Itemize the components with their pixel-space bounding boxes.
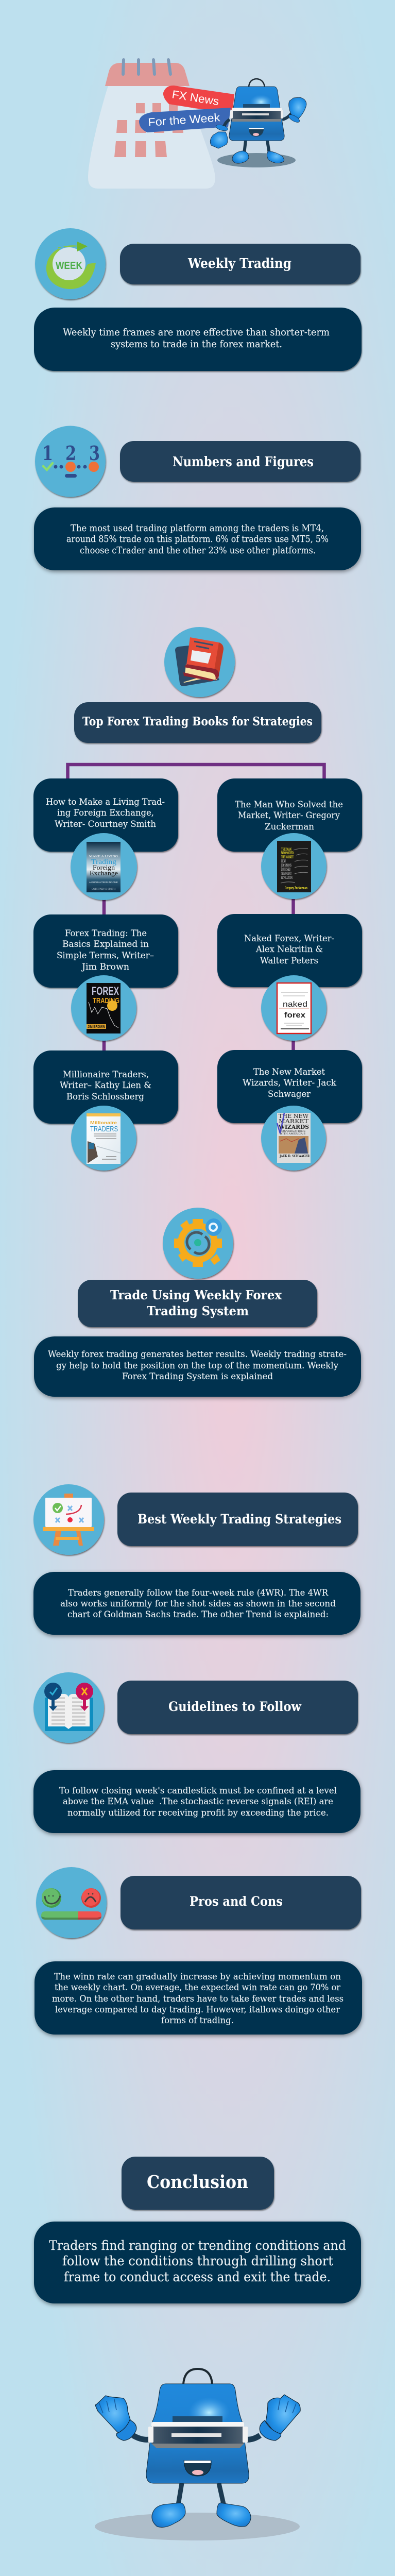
- heading: Numbers and Figures: Numbers and Figures: [173, 454, 314, 470]
- book cover: Trading Foreign Exchange: Exchange: [90, 869, 118, 877]
- book cover: The Man Who Solved the Market: THE QUANT: [281, 872, 291, 876]
- book cover: Millionaire Traders: TRADERS: [90, 1125, 118, 1133]
- book cover: The Man Who Solved the Market: JIM SIMONS: [281, 863, 291, 868]
- panel: pros and cons text: [35, 1961, 362, 2035]
- icon: books: [164, 627, 235, 697]
- book cover: Trading Foreign Exchange: Trading: [91, 858, 116, 866]
- book card: The Man Who Solved the Market: Zuckerman: [265, 822, 314, 832]
- book cover: Forex Trading: JIM BROWN: [88, 1025, 105, 1029]
- text: numbers: [66, 523, 329, 556]
- panel: trading system text: [34, 1336, 361, 1397]
- book card: The Man Who Solved the Market: Market, Writer- Gregory: [238, 810, 340, 821]
- heading: Best Weekly Trading Strategies: Best Weekly Trading Strategies: [138, 1512, 341, 1527]
- text: pros and cons: [52, 1972, 344, 2026]
- banner: FX News: FX News: [171, 88, 220, 108]
- panel: guidelines text: [33, 1770, 360, 1833]
- book cover: Trading Foreign Exchange: A GUARANTEED INCOME: [89, 881, 118, 884]
- heading pill: [120, 441, 360, 482]
- text: conclusion: Traders find ranging or trending conditions and: [49, 2238, 346, 2253]
- book card: The New Market Wizards: [217, 1050, 362, 1171]
- book cover: The New Market Wizards: MARKET: [279, 1118, 309, 1125]
- text: trading system: [48, 1349, 347, 1382]
- text: strategies: Traders generally follow the four-week rule (4WR). The 4WR: [68, 1588, 329, 1598]
- book cover: The New Market Wizards: WITH AMERICA'S: [280, 1132, 305, 1136]
- book card: Forex Trading Basics: Simple Terms, Writer–: [57, 951, 154, 961]
- book card: Naked Forex: Walter Peters: [260, 956, 318, 966]
- section: pros and cons: [35, 1867, 362, 2035]
- book cover: Naked Forex: [277, 983, 311, 1033]
- text: conclusion: follow the conditions through drilling short: [62, 2253, 333, 2268]
- book card: Forex Trading Basics: Jim Brown: [81, 962, 129, 972]
- book cover: Trading Foreign Exchange: [87, 842, 121, 892]
- book cover: The Man Who Solved the Market: HOW: [281, 859, 286, 863]
- text: weekly trading: systems to trade in the forex market.: [111, 338, 282, 350]
- book cover: The Man Who Solved the Market: WHO SOLVED: [281, 851, 294, 855]
- book card: How to Make a Living: [33, 778, 178, 900]
- panel: conclusion text: [34, 2222, 361, 2303]
- text: guidelines: above the EMA value .The stochastic reverse signals (REI) are: [63, 1797, 333, 1807]
- book cover: The Man Who Solved the Market: REVOLUTION: [281, 876, 293, 880]
- text: pros and cons: the weekly chart. On average, the expected win rate can go 70% or: [55, 1982, 341, 1993]
- text: strategies: chart of Goldman Sachs trade. The other Trend is explained:: [67, 1609, 329, 1620]
- book cover: The New Market Wizards: JACK D. SCHWAGER: [279, 1155, 310, 1158]
- text: strategies: [60, 1588, 336, 1620]
- book cover: Trading Foreign Exchange: COURTNEY D SMITH: [92, 888, 115, 891]
- text: weekly trading: [63, 327, 330, 350]
- heading pill: [121, 1876, 361, 1929]
- text: pros and cons: forms of trading.: [161, 2015, 234, 2026]
- icon: week cycle: WEEK: [56, 260, 82, 272]
- text: guidelines: [59, 1786, 337, 1818]
- text: pros and cons: The winn rate can gradually increase by achieving momentum on: [54, 1972, 341, 1982]
- text: pros and cons: leverage compared to day trading. However, itallows doingo other: [55, 2005, 340, 2015]
- heading: Guidelines to Follow: Guidelines to Follow: [168, 1699, 302, 1714]
- book card: How to Make a Living: Writer- Courtney Smith: [55, 819, 156, 829]
- book card: The Man Who Solved the Market: [217, 778, 362, 899]
- heading pill: [122, 2157, 274, 2210]
- book card: Naked Forex: Naked Forex, Writer-: [244, 934, 334, 944]
- mascot: cheering backpack: [95, 2369, 300, 2540]
- book cover: Forex Trading: [87, 983, 121, 1033]
- section: numbers and figures: [34, 426, 361, 570]
- heading pill: [117, 1681, 358, 1734]
- book card: Millionaire Traders: Boris Schlossberg: [66, 1092, 144, 1102]
- heading: Trade Using Weekly Forex Trading System: [110, 1287, 282, 1318]
- book card: Forex Trading Basics: [33, 914, 178, 1041]
- book card: Forex Trading Basics: Forex Trading: The: [65, 928, 147, 939]
- book cover: The Man Who Solved the Market: LAUNCHED: [281, 868, 290, 872]
- heading: Trade Using Weekly Forex Trading System: Trading System: [147, 1303, 249, 1318]
- text: guidelines: normally utilized for receiving profit by exceeding the price.: [67, 1808, 329, 1818]
- section: guidelines to follow: [33, 1672, 360, 1833]
- book cover: Trading Foreign Exchange: Foreign: [93, 863, 115, 871]
- heading: Conclusion: Conclusion: [147, 2172, 248, 2193]
- section: conclusion: [34, 2157, 361, 2303]
- book card: The New Market Wizards: Schwager: [268, 1089, 311, 1099]
- book cover: The Man Who Solved the Market: [277, 841, 311, 892]
- connector: [68, 765, 324, 1051]
- icon: guideline book: [33, 1672, 104, 1743]
- section: weekly trading: [34, 228, 362, 371]
- book card: Forex Trading Basics: Basics Explained in: [62, 939, 149, 950]
- panel: weekly trading text: [34, 308, 362, 371]
- text: pros and cons: more. On the other hand, traders have to take fewer trades and less: [52, 1994, 344, 2004]
- icon: week cycle: [35, 228, 106, 299]
- heading pill: [74, 702, 321, 743]
- text: numbers: around 85% trade on this platform. 6% of traders use MT5, 5%: [66, 534, 329, 545]
- book card: The New Market Wizards: Wizards, Writer- Jack: [243, 1078, 337, 1088]
- icon: strategy board: [33, 1484, 104, 1555]
- book cover: Forex Trading: TRADING: [93, 996, 119, 1005]
- text: conclusion: [49, 2238, 346, 2284]
- text: guidelines: To follow closing week's candlestick must be confined at a level: [59, 1786, 337, 1796]
- book cover: Naked Forex: forex: [284, 1011, 306, 1020]
- book cover: Naked Forex: naked: [283, 1000, 307, 1009]
- mascot: waving backpack: [210, 79, 306, 167]
- panel: strategies text: [33, 1572, 360, 1635]
- text: numbers: The most used trading platform among the traders is MT4,: [71, 523, 324, 534]
- text: weekly trading: Weekly time frames are more effective than shorter-term: [63, 327, 330, 338]
- banner: FX News: [163, 86, 234, 110]
- book card: How to Make a Living: ing Foreign Exchange,: [57, 808, 154, 818]
- book cover: The Man Who Solved the Market: Gregory Zuckerman: [285, 886, 307, 890]
- heading pill: [117, 1493, 358, 1546]
- text: trading system: Weekly forex trading generates better results. Weekly trading strate-: [48, 1349, 347, 1360]
- text: trading system: Forex Trading System is explained: [122, 1371, 273, 1382]
- book cover: The New Market Wizards: WIZARDS: [278, 1123, 309, 1130]
- hero illustration: [88, 60, 306, 189]
- book card: Millionaire Traders: Millionaire Traders,: [63, 1070, 149, 1080]
- book cover: Forex Trading: FOREX: [92, 985, 119, 997]
- text: strategies: also works uniformly for the shot sides as shown in the second: [60, 1599, 336, 1609]
- book card: The New Market Wizards: The New Market: [253, 1067, 325, 1077]
- book card: Millionaire Traders: Writer– Kathy Lien &: [60, 1080, 151, 1091]
- banner: For the Week: For the Week: [148, 111, 221, 129]
- icon: numbers: [35, 426, 106, 497]
- heading: Weekly Trading: Weekly Trading: [187, 256, 291, 272]
- book cover: Trading Foreign Exchange: MAKE A LIVING: [89, 855, 118, 858]
- text: trading system: gy help to hold the position on the top of the momentum. Weekly: [56, 1361, 338, 1371]
- book card: Naked Forex: Alex Nekritin &: [255, 944, 323, 955]
- text: conclusion: frame to conduct access and exit the trade.: [64, 2269, 331, 2284]
- icon: gear: [163, 1208, 233, 1279]
- book cover: Millionaire Traders: Millionaire: [90, 1121, 117, 1125]
- icon: numbers: 1: [42, 442, 53, 465]
- text: numbers: choose cTrader and the other 23% use other platforms.: [80, 545, 316, 556]
- book cover: The Man Who Solved the Market: THE MARKET: [281, 855, 294, 859]
- icon: calendar: [88, 60, 215, 189]
- banner: For the Week: [139, 108, 231, 132]
- section: trade using weekly forex trading system: [34, 1208, 361, 1397]
- book card: How to Make a Living: How to Make a Living Trad-: [46, 797, 165, 807]
- section: best weekly trading strategies: [33, 1484, 360, 1635]
- book card: Naked Forex: [217, 914, 362, 1041]
- book cover: Millionaire Traders: [87, 1113, 121, 1164]
- icon: numbers: 3: [89, 442, 100, 465]
- heading pill: [78, 1280, 317, 1327]
- panel: numbers text: [34, 507, 361, 570]
- heading: Top Forex Trading Books for Strategies: Top Forex Trading Books for Strategies: [82, 715, 313, 728]
- book cover: The New Market Wizards: CONVERSATIONS: [280, 1130, 305, 1133]
- icon: pros and cons faces: [36, 1867, 107, 1938]
- book cover: The New Market Wizards: [277, 1113, 311, 1163]
- heading pill: [120, 244, 360, 284]
- book card: The Man Who Solved the Market: The Man Who Solved the: [235, 800, 343, 810]
- icon: numbers: 2: [65, 442, 76, 465]
- book card: Millionaire Traders: [33, 1050, 178, 1171]
- heading: Pros and Cons: Pros and Cons: [190, 1894, 283, 1909]
- book cover: The Man Who Solved the Market: THE MAN: [281, 847, 291, 852]
- section: top forex trading books: [33, 627, 362, 1171]
- book cover: The New Market Wizards: THE NEW: [279, 1113, 309, 1120]
- heading: Trade Using Weekly Forex Trading System: Trade Using Weekly Forex: [110, 1287, 282, 1302]
